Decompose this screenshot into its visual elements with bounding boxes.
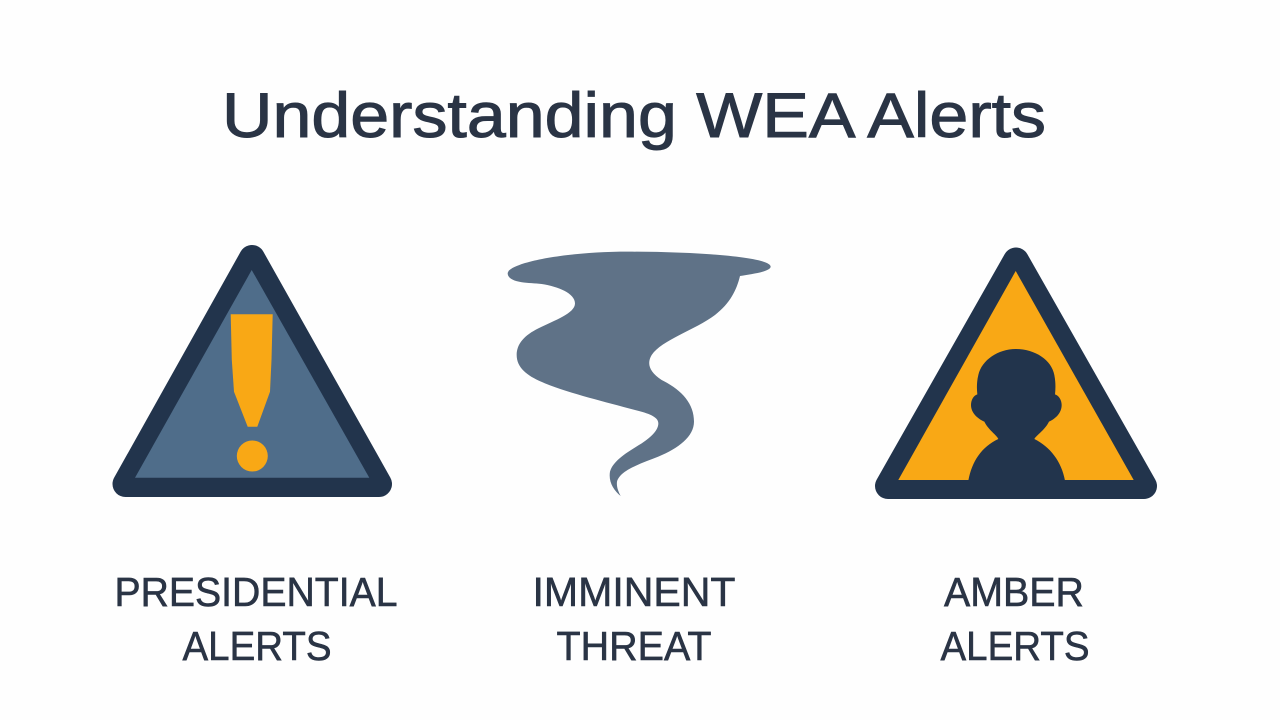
label: presidential alerts: ALERTS (182, 623, 332, 669)
label: amber alerts: AMBER (944, 569, 1084, 615)
label: imminent threat: THREAT (556, 623, 712, 669)
icon: amber alert triangle (888, 260, 1144, 486)
icon: presidential alert triangle (126, 258, 379, 484)
label: imminent threat: IMMINENT (532, 569, 736, 615)
icon: tornado (508, 252, 771, 496)
label: amber alerts (940, 569, 1090, 669)
label: presidential alerts: PRESIDENTIAL (114, 569, 398, 615)
label: imminent threat (532, 569, 736, 669)
title: Understanding WEA Alerts (222, 81, 1046, 151)
label: amber alerts: ALERTS (940, 623, 1090, 669)
label: presidential alerts (114, 569, 398, 669)
